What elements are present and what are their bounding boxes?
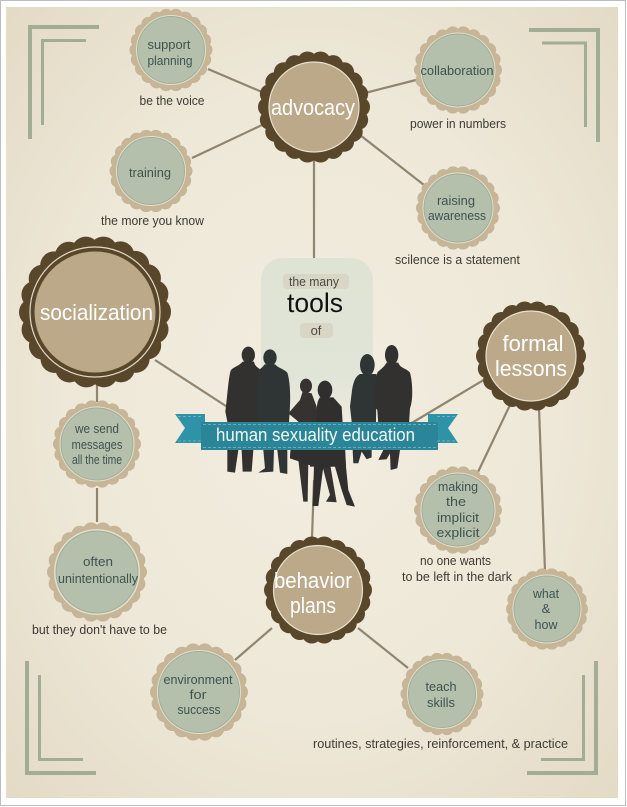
banner right tail (428, 414, 458, 443)
label: routines, strategies, reinforcement, and practice: routines, strategies, reinforcement, & practice (313, 736, 568, 751)
corner bracket: bottom left (25, 661, 96, 775)
label: scilence is a statement: scilence is a statement (395, 252, 520, 267)
badge: environment for success (152, 646, 246, 738)
banner main band (201, 422, 438, 450)
badge: making the implicit explicit (416, 468, 500, 552)
badge: behavior plans (267, 539, 369, 641)
badge: often unintentionally: unintentionally (58, 571, 138, 586)
badge: training (112, 132, 190, 210)
badge: what and how: & (542, 601, 551, 616)
title: of (300, 323, 333, 338)
badge: making the implicit explicit: making (438, 479, 478, 494)
badge: we send messages all the time (56, 402, 138, 486)
badge: formal lessons (479, 304, 583, 408)
badge: making the implicit explicit: implicit (437, 510, 479, 525)
badge: environment for success: environment (164, 672, 233, 687)
badge: advocacy (262, 55, 366, 159)
label: no one wants to be left in the dark (402, 553, 512, 584)
silhouettes of people (225, 345, 412, 507)
badge: support planning (132, 11, 210, 89)
badge: we send messages all the time: we send (74, 421, 119, 436)
badge: formal lessons: formal (502, 331, 564, 356)
badge: behavior plans: plans (290, 593, 336, 618)
title: tools: tools (287, 288, 343, 318)
corner bracket: top right (529, 28, 600, 142)
title panel (261, 258, 373, 418)
connector lines (97, 69, 545, 668)
badge: training: training (129, 165, 171, 180)
badge: what and how: how (534, 617, 558, 632)
badge: environment for success: success (178, 702, 221, 717)
badge: raising awareness: raising (437, 193, 475, 208)
label: but they don't have to be: but they don't have to be (32, 622, 167, 637)
label: the more you know: the more you know (101, 213, 205, 228)
badge: support planning: planning (148, 53, 192, 68)
woman's skirt (290, 447, 346, 467)
badge: raising awareness (418, 168, 498, 248)
badge: what and how: what (532, 586, 559, 601)
label: no one wants to be left in the dark: no one wants (420, 553, 491, 568)
banner left tail (175, 414, 205, 443)
label: no one wants to be left in the dark: to be left in the dark (402, 569, 512, 584)
badge: making the implicit explicit: explicit (436, 525, 480, 540)
badge: raising awareness: awareness (428, 208, 486, 223)
corner bracket: bottom right (527, 661, 598, 775)
badge: socialization (23, 240, 167, 384)
badge: what and how (508, 570, 586, 648)
label: power in numbers: power in numbers (410, 116, 506, 131)
badge: support planning: support (148, 37, 191, 52)
badge: we send messages all the time: messages (72, 437, 123, 452)
banner text: human sexuality education (216, 425, 415, 445)
badge: teach skills (403, 655, 481, 733)
badge: advocacy: advocacy (271, 95, 355, 120)
badge: environment for success: for (190, 687, 207, 702)
corner bracket: top left (28, 25, 99, 139)
title: of: of (311, 323, 322, 338)
banner (175, 414, 458, 450)
badge: teach skills: skills (427, 695, 455, 710)
badge: behavior plans: behavior (274, 568, 352, 593)
title: the many: the many (289, 274, 339, 289)
badge: often unintentionally (50, 524, 144, 620)
label: be the voice: be the voice (140, 93, 204, 108)
badge: socialization: socialization (40, 300, 153, 325)
badge: making the implicit explicit: the (446, 494, 466, 509)
badge: collaboration: collaboration (420, 63, 494, 78)
badge: often unintentionally: often (83, 554, 113, 569)
badge: formal lessons: lessons (495, 356, 567, 381)
badge: teach skills: teach (426, 679, 456, 694)
badge: collaboration (416, 28, 500, 112)
badge: we send messages all the time: all the time (72, 452, 122, 467)
